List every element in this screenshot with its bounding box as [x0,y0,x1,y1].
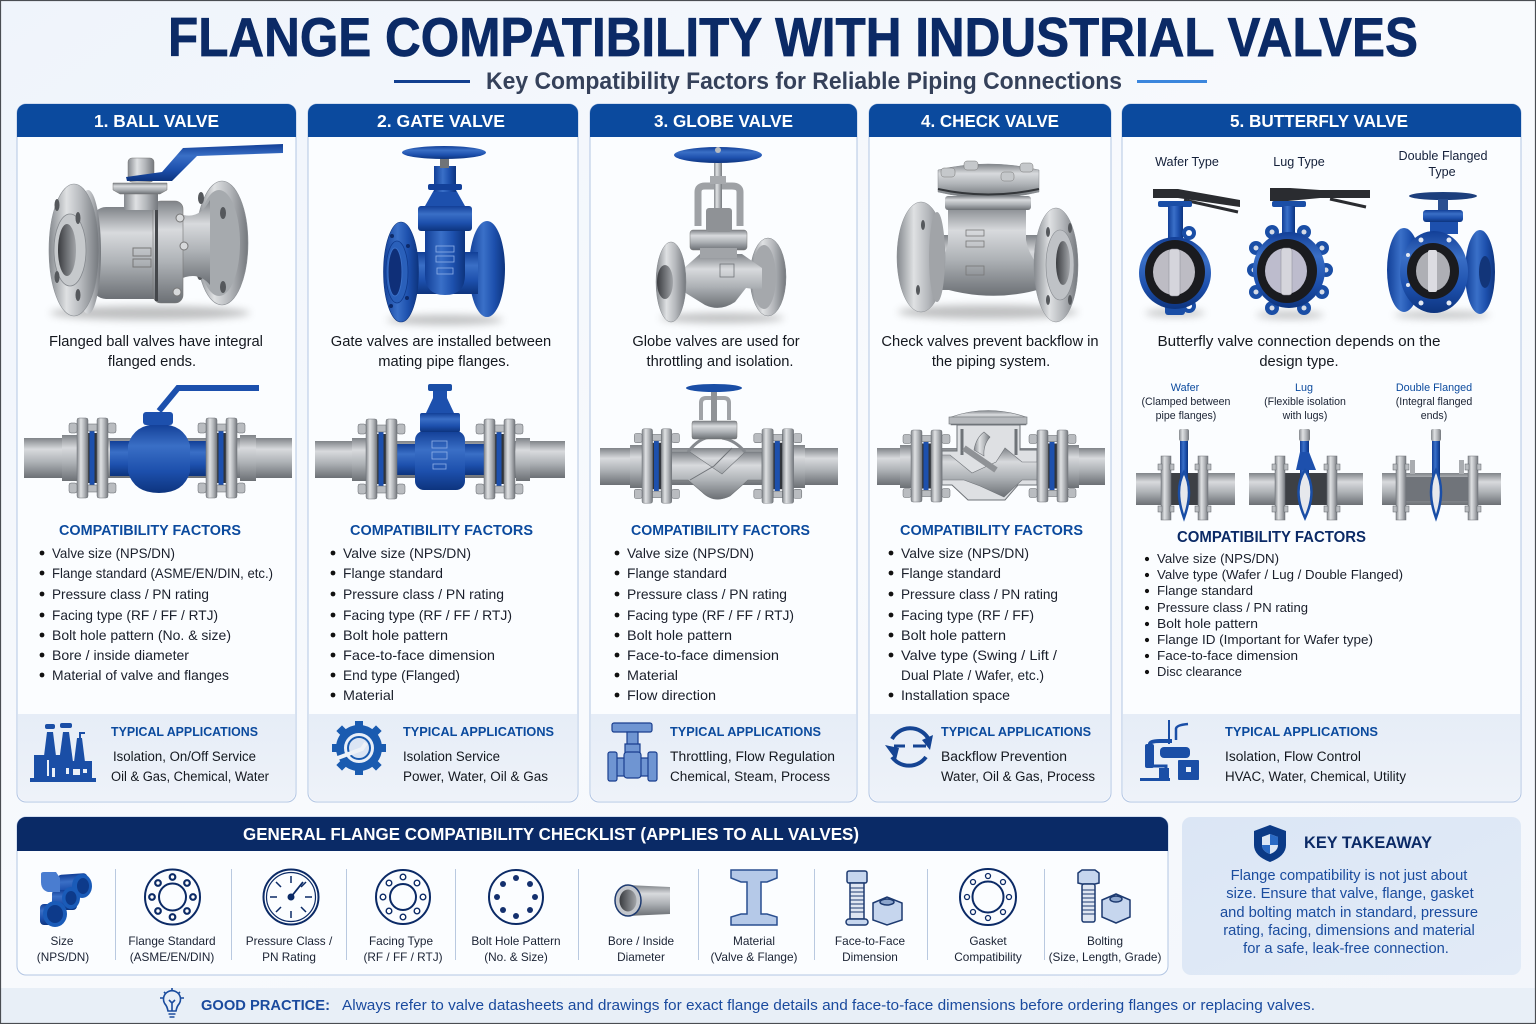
installation labels: Double Flanged [1396,382,1472,394]
illustration: double flanged type [1387,192,1495,319]
item: material [710,870,798,964]
typical applications band: Chemical, Steam, Process [670,769,830,784]
takeaway text [1220,868,1478,957]
description: the piping system. [932,354,1050,370]
panel: general checklist [17,817,1168,975]
item: facing type: Facing Type [369,934,433,948]
description [632,334,800,370]
description: Butterfly valve connection depends on the [1158,334,1440,350]
header: gate valve [308,104,578,137]
typical applications band: Throttling, Flow Regulation [670,749,835,764]
panel: butterfly valve [1122,104,1521,802]
good practice strip [0,988,1536,1024]
compatibility factors: Pressure class / PN rating [52,587,209,602]
compatibility factors: Flange standard [343,566,443,581]
header: globe valve [590,104,857,137]
compatibility factors: Valve size (NPS/DN) [52,546,175,561]
compatibility factors: End type (Flanged) [343,668,460,683]
header: check valve: 4. CHECK VALVE [921,111,1059,131]
illustration: flanged gate valve [384,146,505,325]
illustration: wafer type [1139,189,1240,317]
compatibility factors: Flange standard [627,566,727,581]
installation labels: Lug [1295,382,1313,394]
illustration: wafer installed [1136,429,1235,520]
type labels [1155,149,1487,179]
subtitle with accent rules: Key Compatibility Factors for Reliable Piping Connections [486,68,1122,95]
icon: light bulb [160,988,184,1017]
description [331,334,551,370]
good practice strip: Always refer to valve datasheets and drawings for exact flange details and face-to-face dimensions before ordering flanges or replacing valves. [342,998,1315,1014]
description: flanged ends. [108,354,196,370]
item: bolting: Bolting [1087,934,1123,948]
illustration: double flanged installed [1382,429,1501,520]
illustration: flanged globe valve [656,147,786,323]
installation labels: (Clamped between [1142,396,1231,408]
compatibility factors: Facing type (RF / FF / RTJ) [343,608,512,623]
item: facing type: (RF / FF / RTJ) [363,950,443,964]
header: check valve [869,104,1111,137]
compatibility factors: Valve size (NPS/DN) [343,546,471,561]
takeaway text: size. Ensure that valve, flange, gasket [1226,886,1474,902]
typical applications band [591,714,856,801]
installation labels: (Integral flanged [1396,396,1472,408]
compatibility factors: Facing type (RF / FF / RTJ) [52,608,218,623]
compatibility factors [331,523,533,703]
typical applications band [1123,714,1520,801]
item: bolting: (Size, Length, Grade) [1049,950,1161,964]
illustration: lug installed [1249,429,1363,520]
typical applications band [870,714,1110,801]
compatibility factors: Flange standard [1157,583,1253,598]
installation labels: with lugs) [1282,410,1327,422]
compatibility factors: COMPATIBILITY FACTORS [1177,529,1366,546]
compatibility factors: COMPATIBILITY FACTORS [631,523,810,539]
compatibility factors: Flange standard [901,566,1001,581]
compatibility factors: COMPATIBILITY FACTORS [900,523,1083,539]
item: face-to-face: Face-to-Face [835,934,906,948]
description: Flanged ball valves have integral [49,334,263,350]
panel: key takeaway: KEY TAKEAWAY [1304,833,1433,852]
panel: check valve [869,104,1111,802]
typical applications band: Isolation Service [403,749,500,764]
compatibility factors: Pressure class / PN rating [901,587,1058,602]
installation labels: Wafer [1171,382,1200,394]
typical applications band: TYPICAL APPLICATIONS [403,724,554,739]
illustration: flanged ball valve [49,144,283,320]
typical applications band: TYPICAL APPLICATIONS [1225,724,1378,739]
title: FLANGE COMPATIBILITY WITH INDUSTRIAL VALVES [168,6,1418,68]
compatibility factors: Valve size (NPS/DN) [901,546,1029,561]
typical applications band [18,714,295,801]
compatibility factors: Face-to-face dimension [627,648,779,663]
typical applications band: Water, Oil & Gas, Process [941,769,1095,784]
illustration: ball valve between flanges [24,388,292,498]
good practice strip: GOOD PRACTICE: [201,998,330,1014]
description: mating pipe flanges. [378,354,510,370]
compatibility factors: Disc clearance [1157,664,1242,679]
item: bore: Bore / Inside [608,934,675,948]
illustration: check valve between flanges [877,410,1105,502]
compatibility factors: Material [627,668,678,683]
item: size [37,872,92,964]
description [1158,334,1440,370]
installation labels: (Flexible isolation [1264,396,1346,408]
compatibility factors [615,523,810,703]
description [49,334,263,370]
compatibility factors [1145,529,1403,679]
header: butterfly valve [1122,104,1521,137]
illustration: flanged check valve [897,161,1078,322]
compatibility factors: COMPATIBILITY FACTORS [59,523,241,539]
compatibility factors: Bolt hole pattern [627,628,732,643]
typical applications band: Power, Water, Oil & Gas [403,769,548,784]
compatibility factors: Dual Plate / Wafer, etc.) [901,668,1044,683]
type labels: Double Flanged [1399,149,1487,163]
description [881,334,1099,370]
compatibility factors: Flow direction [627,688,716,703]
compatibility factors: Installation space [901,688,1010,703]
illustration: gate valve between flanges [315,384,565,499]
takeaway text: and bolting match in standard, pressure [1220,905,1478,921]
item: flange standard: Flange Standard [128,934,216,948]
compatibility factors: Face-to-face dimension [1157,648,1298,663]
typical applications band: Oil & Gas, Chemical, Water [111,769,270,784]
typical applications band: Isolation, Flow Control [1225,749,1361,764]
description: throttling and isolation. [647,354,793,370]
compatibility factors: COMPATIBILITY FACTORS [350,523,533,539]
compatibility factors: Facing type (RF / FF / RTJ) [627,608,794,623]
item: face-to-face: Dimension [842,950,898,964]
checklist header [17,817,1168,851]
item: bolt hole pattern [471,870,561,964]
compatibility factors: Pressure class / PN rating [343,587,504,602]
panel: globe valve [590,104,857,802]
header: ball valve [17,104,296,137]
item: material: Material [733,934,775,948]
compatibility factors: Bolt hole pattern [901,628,1006,643]
description: Check valves prevent backflow in [881,334,1099,350]
header: globe valve: 3. GLOBE VALVE [654,111,793,131]
compatibility factors: Material of valve and flanges [52,668,229,683]
type labels: Lug Type [1273,155,1325,169]
item: bolting [1049,870,1161,964]
typical applications band: HVAC, Water, Chemical, Utility [1225,769,1406,784]
takeaway text: for a safe, leak-free connection. [1243,941,1449,957]
compatibility factors: Bore / inside diameter [52,648,189,663]
item: pressure class: Pressure Class / [246,934,333,948]
item: gasket [954,869,1022,964]
compatibility factors: Flange standard (ASME/EN/DIN, etc.) [52,566,273,581]
compatibility factors: Valve size (NPS/DN) [1157,551,1279,566]
panel: ball valve [17,104,296,802]
compatibility factors: Flange ID (Important for Wafer type) [1157,632,1373,647]
item: bolt hole pattern: (No. & Size) [484,950,548,964]
icon: gear and valve [332,721,386,775]
compatibility factors: Bolt hole pattern [1157,616,1258,631]
description: Globe valves are used for [632,334,800,350]
installation labels: ends) [1421,410,1447,422]
panel: gate valve [308,104,578,802]
header: butterfly valve: 5. BUTTERFLY VALVE [1230,111,1408,131]
item: pressure class [246,870,333,964]
panel: key takeaway [1182,817,1521,975]
typical applications band: TYPICAL APPLICATIONS [670,724,821,739]
illustration: lug type [1247,188,1370,319]
compatibility factors [889,523,1083,703]
takeaway text: Flange compatibility is not just about [1231,868,1467,884]
compatibility factors: Pressure class / PN rating [627,587,787,602]
item: material: (Valve & Flange) [710,950,798,964]
item: bore [608,885,675,964]
compatibility factors [40,523,273,683]
icon: refinery [30,723,96,782]
type labels: Wafer Type [1155,155,1219,169]
icon: globe valve [608,723,657,781]
typical applications band: TYPICAL APPLICATIONS [111,724,258,739]
compatibility factors: Facing type (RF / FF) [901,608,1034,623]
compatibility factors: Bolt hole pattern [343,628,448,643]
item: flange standard: (ASME/EN/DIN) [130,950,214,964]
description: Gate valves are installed between [331,334,551,350]
item: facing type [363,870,443,964]
takeaway text: rating, facing, dimensions and material [1223,923,1475,939]
item: bore: Diameter [617,950,665,964]
icon: backflow arrows [885,728,933,766]
installation labels: pipe flanges) [1156,410,1216,422]
typical applications band: Backflow Prevention [941,749,1067,764]
illustration: globe valve between flanges [600,384,838,503]
installation labels [1142,382,1472,422]
header: ball valve: 1. BALL VALVE [94,111,219,131]
compatibility factors: Valve type (Wafer / Lug / Double Flanged) [1157,567,1403,582]
compatibility factors: Valve size (NPS/DN) [627,546,754,561]
icon: pump station [1140,720,1199,781]
compatibility factors: Material [343,688,394,703]
item: flange standard [128,870,216,964]
item: size: (NPS/DN) [37,950,89,964]
header: gate valve: 2. GATE VALVE [377,111,505,131]
type labels: Type [1428,165,1456,179]
compatibility factors: Pressure class / PN rating [1157,600,1308,615]
item: gasket: Compatibility [954,950,1022,964]
item: pressure class: PN Rating [262,950,316,964]
item: size: Size [51,934,74,948]
compatibility factors: Valve type (Swing / Lift / [901,648,1057,663]
icon: shield [1254,825,1286,862]
typical applications band: TYPICAL APPLICATIONS [941,724,1091,739]
description: design type. [1259,354,1339,370]
compatibility factors: Bolt hole pattern (No. & size) [52,628,231,643]
item: gasket: Gasket [969,934,1007,948]
typical applications band: Isolation, On/Off Service [113,749,256,764]
checklist header: GENERAL FLANGE COMPATIBILITY CHECKLIST (APPLIES TO ALL VALVES) [243,824,859,844]
compatibility factors: Face-to-face dimension [343,648,495,663]
item: bolt hole pattern: Bolt Hole Pattern [471,934,561,948]
typical applications band [309,714,577,801]
item: face-to-face [835,871,906,964]
